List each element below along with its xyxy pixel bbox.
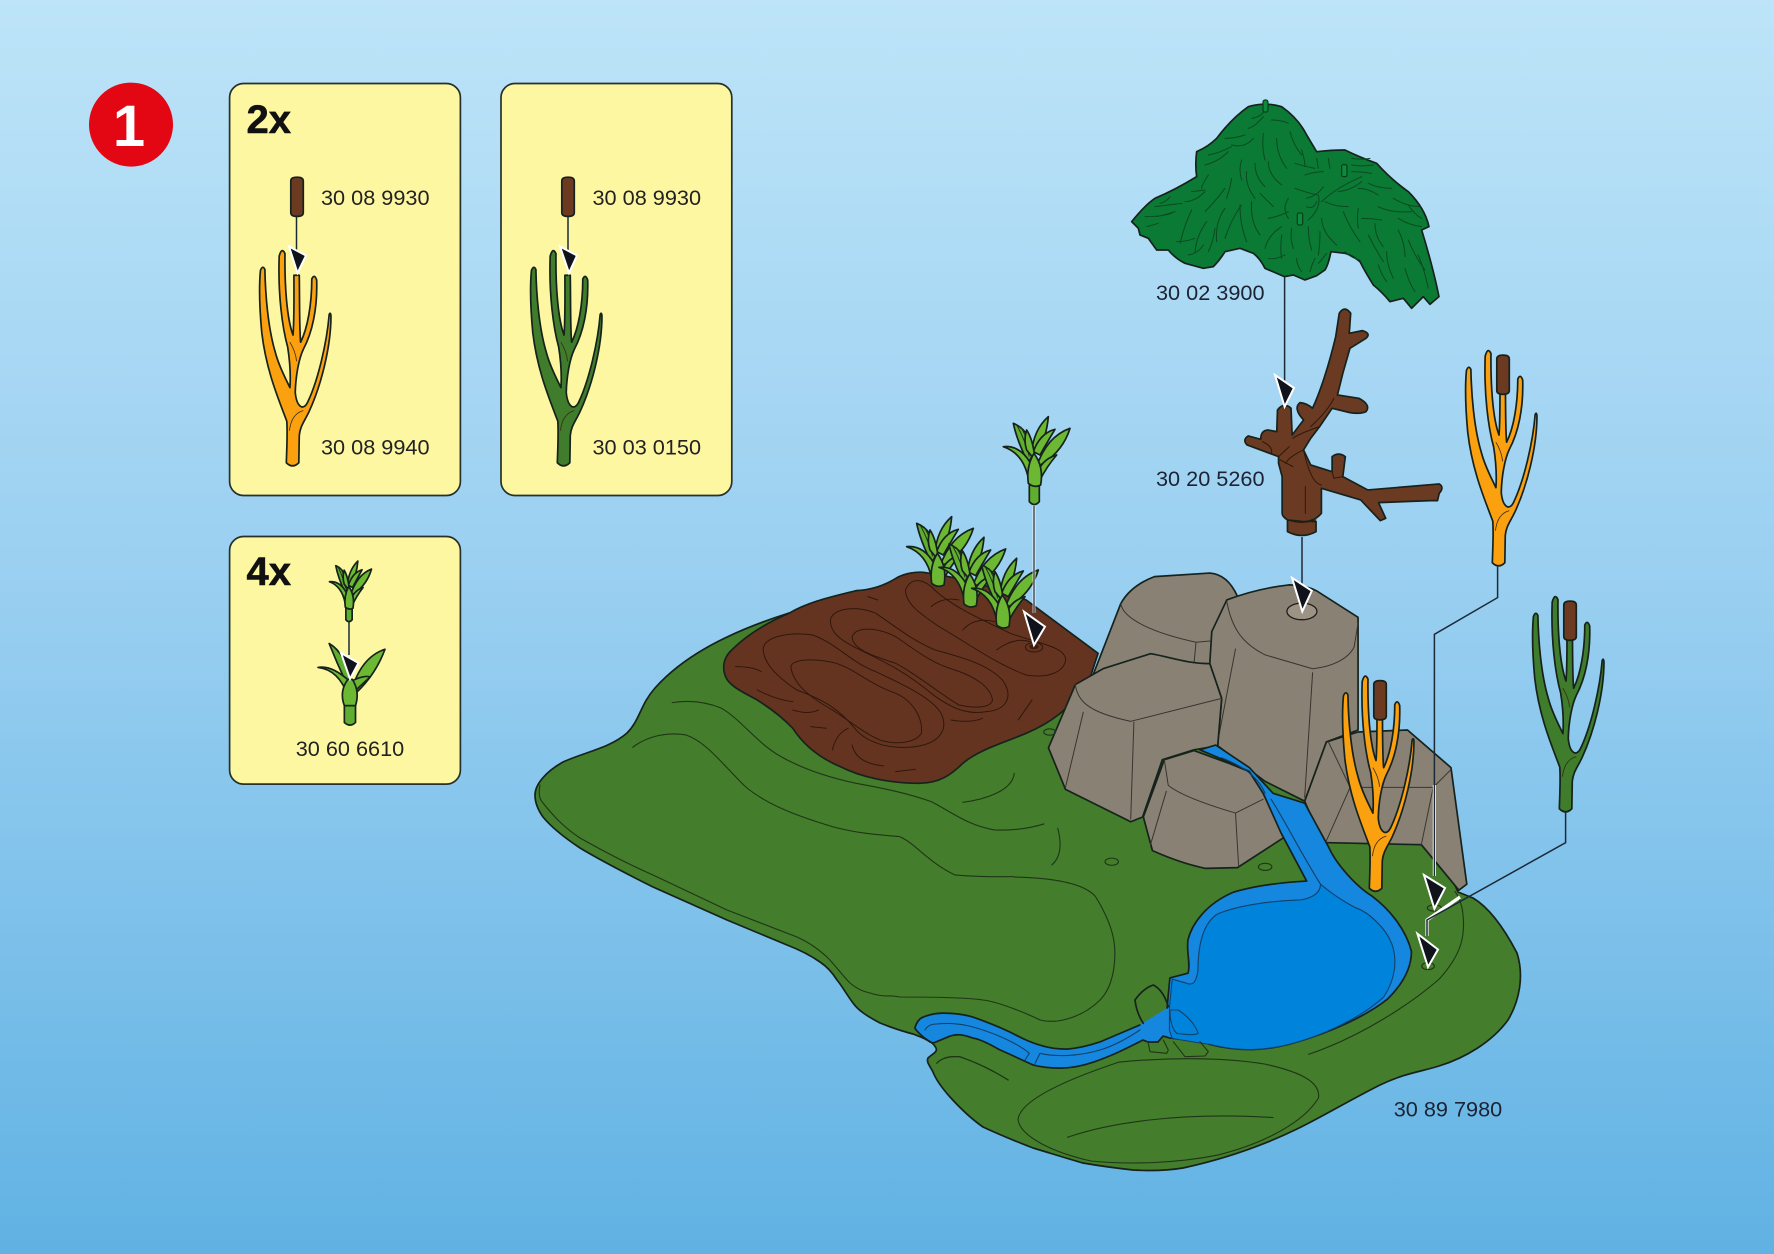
- right low rock: [1305, 730, 1467, 890]
- arrow: [289, 217, 306, 273]
- terrain contours, right: [1018, 891, 1464, 1163]
- icon: plant base: [318, 644, 385, 725]
- label: base part number: 30 89 7980: [1394, 1097, 1502, 1122]
- icon: plant top: [329, 561, 371, 622]
- back rock: [1093, 573, 1237, 718]
- tree canopy: [1132, 100, 1439, 308]
- arrow: green reed to base: [1417, 812, 1566, 967]
- rocks: [1048, 573, 1467, 890]
- step number badge: 1: [113, 94, 145, 159]
- leaf texture: [1145, 110, 1428, 292]
- inner pool: [1169, 884, 1395, 1050]
- front orange reed: [1343, 676, 1414, 891]
- icon: green reed: [531, 251, 602, 466]
- part number cattail: 30 08 9930: [592, 185, 701, 210]
- panel: plant, 4x: [230, 536, 460, 784]
- bank line: [937, 1057, 1008, 1080]
- panel: orange reed, 2x: [230, 84, 460, 496]
- base rim line and lawn contour: [539, 785, 1115, 1021]
- bridge outlines: [1135, 985, 1168, 1023]
- icon: cattail head: [562, 177, 574, 216]
- panel: green reed: [501, 84, 732, 496]
- upper orange reed: [1466, 351, 1537, 566]
- right green reed: [1533, 597, 1604, 812]
- pegs on ground: [1044, 729, 1441, 970]
- part number green reed: 30 03 0150: [592, 435, 701, 460]
- soil patch: [724, 572, 1098, 783]
- arrow: orange reed to base: [1424, 567, 1498, 909]
- arrow: plant to soil: [1024, 506, 1045, 645]
- tree trunk: [1245, 309, 1442, 535]
- waterfall lines: [1222, 758, 1321, 884]
- arrow: canopy to trunk: [1275, 277, 1294, 407]
- plant 1: [907, 517, 973, 586]
- icon: cattail head: [291, 177, 303, 216]
- water: [915, 745, 1411, 1068]
- island base: [535, 613, 1520, 1171]
- stream details: [925, 985, 1208, 1080]
- step number badge: [89, 83, 173, 167]
- centre rock: [1210, 585, 1358, 801]
- quantity 4x: 4x: [246, 550, 291, 594]
- plant above soil: [1003, 417, 1070, 504]
- label: canopy part number: 30 02 3900: [1156, 280, 1265, 305]
- left rock: [1048, 654, 1222, 822]
- terrain contours, left: [633, 701, 1060, 877]
- arrow: [341, 622, 358, 679]
- part number plant: 30 60 6610: [296, 736, 404, 761]
- icon: orange reed: [260, 251, 331, 466]
- part number cattail: 30 08 9930: [321, 185, 430, 210]
- front rock: [1143, 751, 1285, 868]
- part number orange reed: 30 08 9940: [321, 435, 430, 460]
- soil contours: [735, 581, 1066, 772]
- plants on soil: [907, 517, 1038, 628]
- arrow: [560, 217, 577, 273]
- plant 3: [972, 558, 1038, 628]
- canopy pegs: [1263, 100, 1347, 225]
- waterfall, pool and stream: [915, 745, 1411, 1068]
- plant 2: [939, 537, 1006, 607]
- quantity 2x: 2x: [246, 98, 291, 142]
- front bank contour: [937, 1057, 1008, 1080]
- label: trunk part number: 30 20 5260: [1156, 466, 1265, 491]
- plant socket: [1029, 644, 1039, 649]
- arrow: trunk to rock: [1292, 537, 1312, 611]
